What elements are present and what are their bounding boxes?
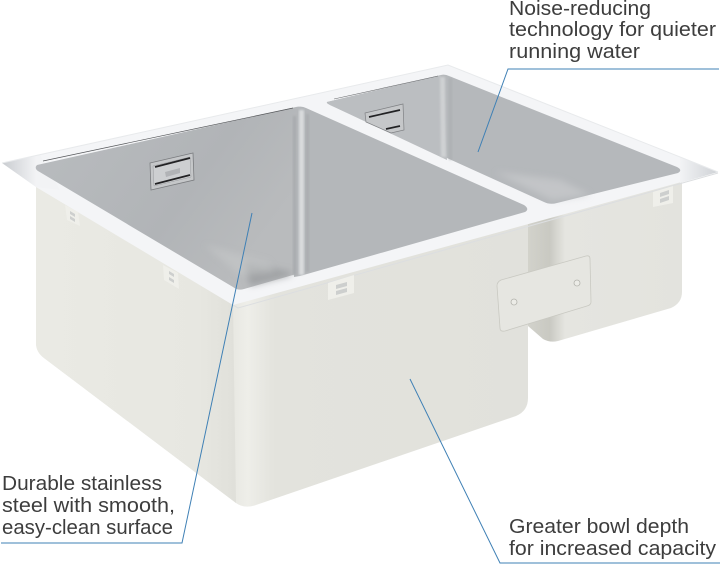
callout leader: stainless steel [1, 213, 252, 543]
drain overflow large bowl [150, 153, 194, 190]
large bowl body [36, 184, 528, 507]
text: noise-reducing technology [509, 0, 716, 63]
text: durable stainless steel: easy-clean surface [2, 516, 173, 539]
text: greater bowl depth: Greater bowl depth [509, 515, 689, 538]
rim groove [43, 108, 293, 161]
clip 4 [653, 186, 673, 207]
floor shadow [245, 262, 292, 286]
bowl corner highlight [299, 110, 304, 275]
floor reflection [495, 172, 590, 200]
text: durable stainless steel: Durable stainless [2, 472, 162, 495]
callout leader: noise-reducing [478, 69, 719, 152]
right wall [327, 75, 680, 204]
text: noise-reducing technology: technology for quieter [509, 18, 716, 41]
back wall [36, 107, 303, 290]
mounting clips [65, 186, 673, 300]
text: greater bowl depth [509, 515, 717, 560]
back wall [327, 75, 447, 160]
clip 3 [328, 275, 354, 300]
steel rim [2, 65, 718, 308]
text: durable stainless steel: steel with smooth, [2, 494, 175, 517]
text: greater bowl depth: for increased capacity [509, 537, 717, 560]
clip 1 [65, 205, 80, 226]
small bowl [327, 75, 680, 204]
drain overflow small bowl [365, 104, 404, 133]
right wall [294, 107, 527, 277]
clip 2 [163, 265, 179, 289]
large bowl [36, 107, 527, 290]
mounting bracket [497, 256, 591, 331]
callout leader: bowl depth [410, 379, 720, 563]
text: noise-reducing technology: running water [509, 40, 640, 63]
rim groove [334, 76, 438, 99]
text: durable stainless steel [2, 472, 175, 539]
corner highlight [440, 77, 446, 157]
small bowl body [528, 180, 682, 342]
